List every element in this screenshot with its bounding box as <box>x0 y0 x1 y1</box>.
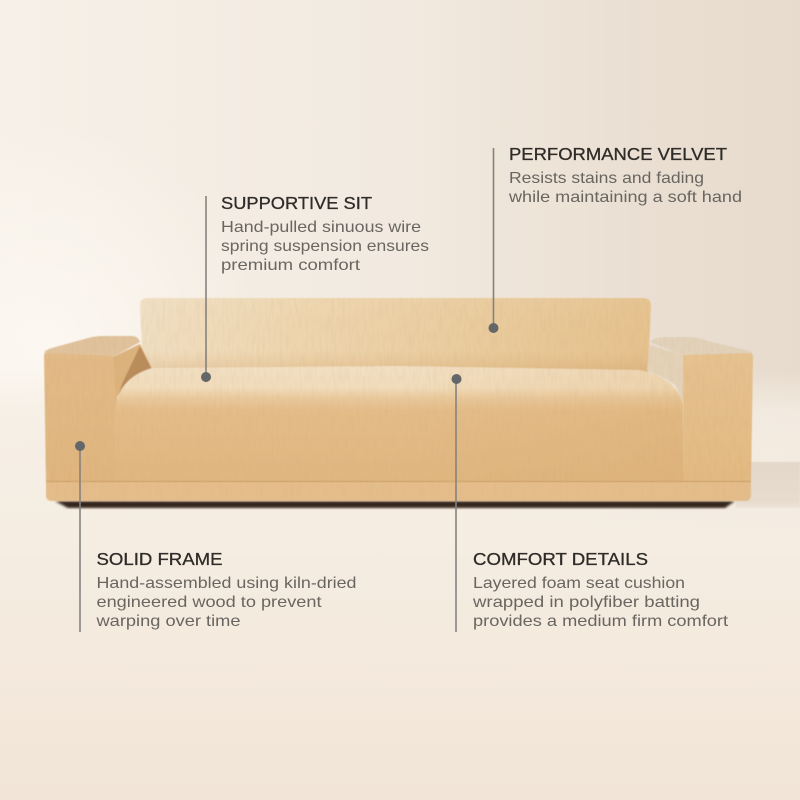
seat cushion <box>115 366 684 482</box>
body text <box>221 219 429 274</box>
body text: Resists stains and fading <box>509 170 704 187</box>
sofa under-shadow <box>55 501 735 508</box>
left arm dark crease <box>118 346 152 397</box>
heading: COMFORT DETAILS <box>473 549 648 569</box>
right arm top <box>650 337 752 355</box>
body text: warping over time <box>95 613 241 630</box>
marker dot <box>75 441 85 451</box>
body text: Hand-pulled sinuous wire <box>221 219 421 236</box>
body text: while maintaining a soft hand <box>508 189 742 206</box>
callout: solid frame <box>75 441 356 632</box>
right arm front <box>683 353 753 482</box>
callout: comfort details <box>452 374 729 632</box>
marker dot <box>452 374 462 384</box>
fabric texture <box>40 295 760 505</box>
body text: Hand-assembled using kiln-dried <box>96 575 356 592</box>
body text: Layered foam seat cushion <box>473 575 685 592</box>
sofa base plinth <box>46 482 751 501</box>
heading: SOLID FRAME <box>96 549 222 569</box>
body text <box>95 575 357 630</box>
marker dot <box>201 372 211 382</box>
body text: spring suspension ensures <box>221 238 429 255</box>
left arm inner side <box>110 344 152 481</box>
leader line <box>205 196 207 377</box>
body text: engineered wood to prevent <box>96 594 322 611</box>
body text: premium comfort <box>221 257 361 274</box>
sofa back cushion <box>140 298 651 372</box>
right floor shadow <box>735 462 800 508</box>
left arm top <box>44 336 140 357</box>
body text <box>508 170 742 206</box>
leader line <box>455 379 457 632</box>
sofa <box>44 298 800 508</box>
body text: wrapped in polyfiber batting <box>472 594 700 611</box>
right arm inner side <box>647 345 684 405</box>
body text <box>472 575 729 630</box>
callout: performance velvet <box>488 144 742 333</box>
leader line <box>492 148 494 328</box>
heading: PERFORMANCE VELVET <box>509 144 727 164</box>
body text: provides a medium firm comfort <box>473 613 729 630</box>
marker dot <box>488 323 498 333</box>
leader line <box>79 446 81 632</box>
left arm front <box>44 353 116 482</box>
heading: SUPPORTIVE SIT <box>221 193 372 213</box>
callout: supportive sit <box>201 193 429 382</box>
